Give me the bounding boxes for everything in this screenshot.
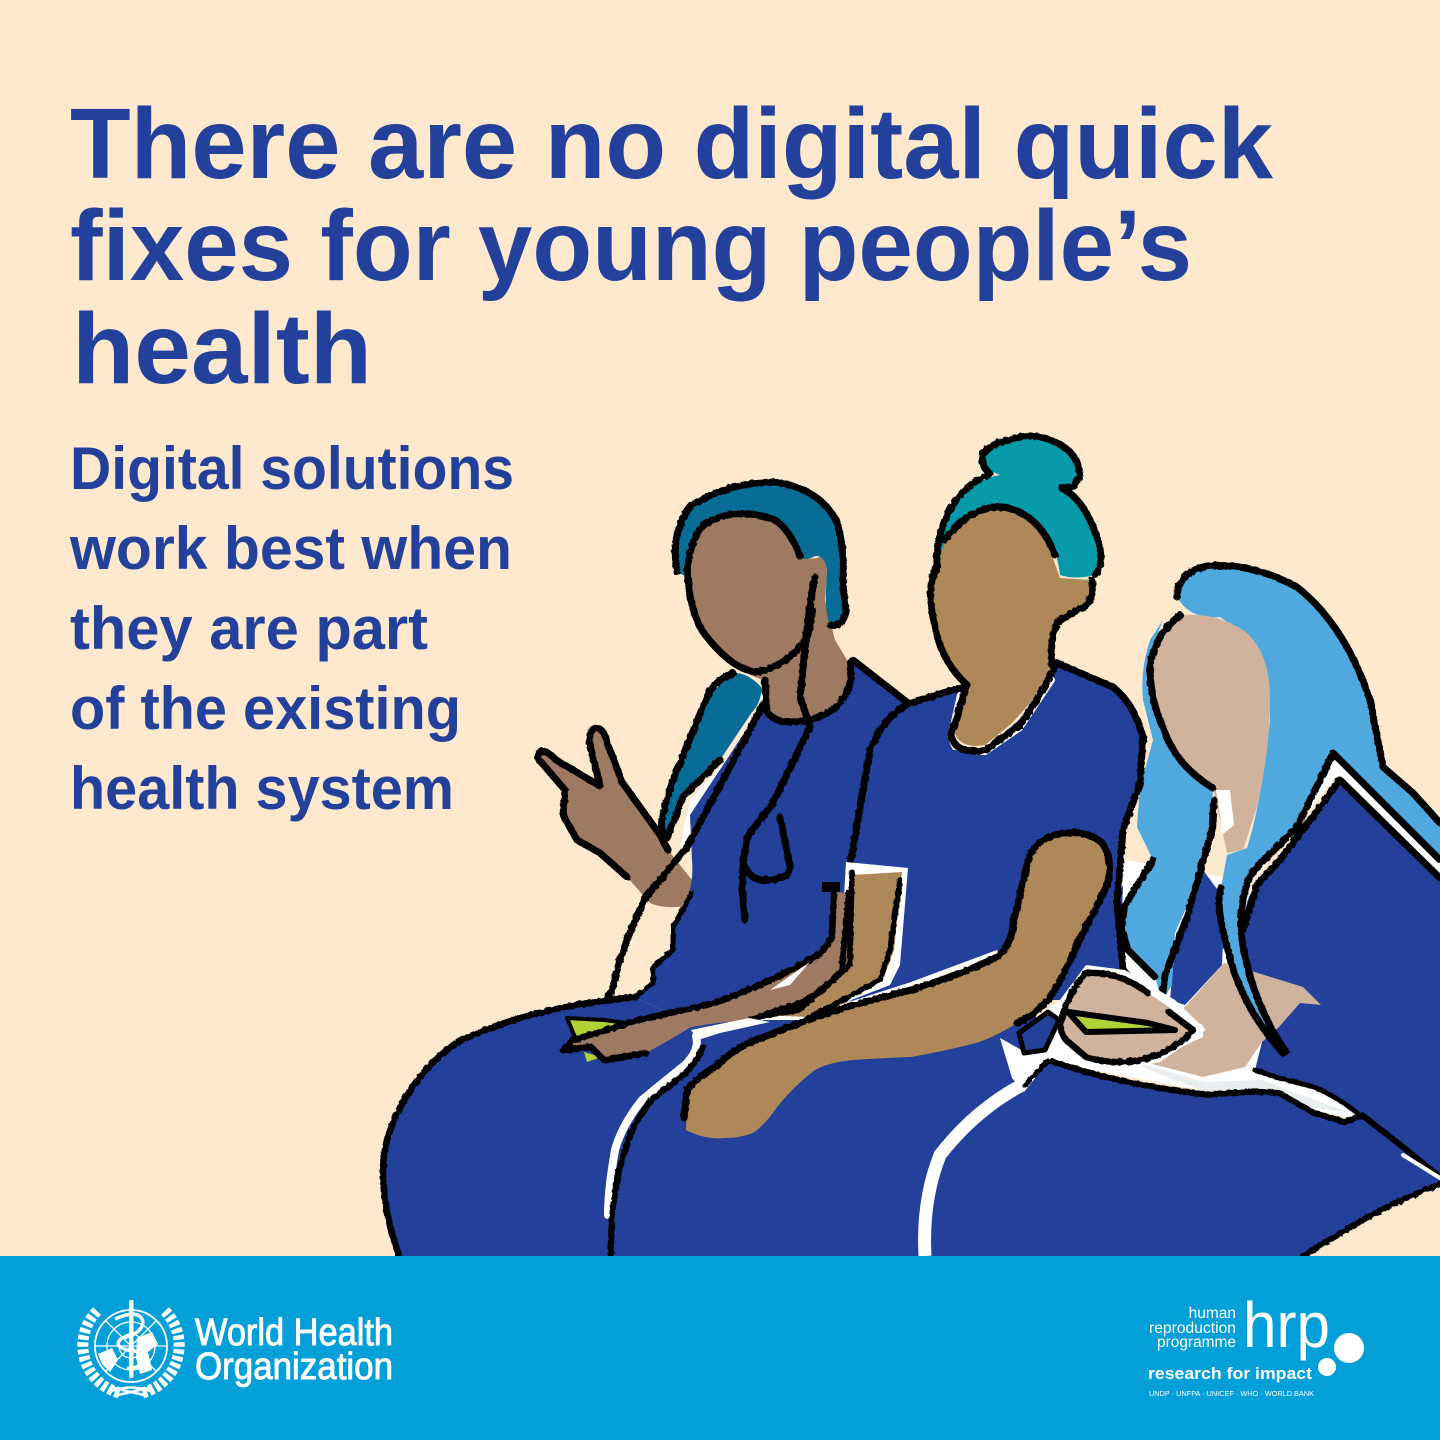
hair	[937, 473, 1101, 578]
title	[70, 88, 1273, 405]
phone	[567, 1018, 627, 1042]
right woman hand and phone	[1019, 965, 1206, 1070]
arm and torso skin	[1148, 963, 1321, 1077]
logo: human reproduction programme: reproduction	[1149, 1320, 1236, 1337]
blue gap near hand	[1019, 1012, 1059, 1053]
left woman forearm and phone	[563, 882, 849, 1062]
face and neck	[1150, 615, 1270, 853]
ponytail	[662, 673, 762, 838]
logo: World Health Organization	[83, 1300, 393, 1396]
figure: middle woman lap	[608, 950, 1066, 1256]
figure: left woman upper body	[538, 482, 908, 1023]
figure: middle woman	[840, 436, 1143, 1000]
white edge line	[608, 1036, 697, 1215]
shirt	[840, 663, 1143, 1000]
title: health	[72, 293, 372, 405]
white junction	[1000, 1038, 1066, 1092]
logo: human reproduction programme: UNDP · UNFPA · UNICEF · WHO · WORLD BANK	[1149, 1389, 1314, 1398]
peace-sign hand	[541, 728, 692, 907]
subtitle text block: health system	[70, 755, 454, 822]
white band to right lap	[925, 1085, 1022, 1256]
logo: World Health Organization: Organization	[195, 1346, 393, 1388]
logo: human reproduction programme: programme	[1157, 1334, 1236, 1351]
white backing	[1000, 860, 1365, 1120]
figure: right woman	[1000, 565, 1440, 1180]
figure: left woman lap	[383, 997, 1000, 1256]
main hair	[1177, 565, 1440, 1053]
subtitle text block: they are part	[70, 595, 428, 662]
blue gaps between hair	[1170, 870, 1225, 1005]
phone	[1068, 1012, 1175, 1032]
middle woman arm	[684, 833, 1110, 1138]
hair bun	[982, 436, 1080, 490]
face and neck	[930, 507, 1093, 746]
figure: right woman lap	[912, 1060, 1440, 1256]
footer band	[0, 1256, 1440, 1440]
hair and shirt outlines	[1121, 565, 1440, 1117]
white neck sliver	[1216, 790, 1234, 835]
subtitle text block	[69, 435, 514, 822]
logo: human reproduction programme: hrp	[1243, 1289, 1330, 1361]
hair	[676, 483, 846, 627]
collar white	[951, 680, 1052, 752]
title: There are no digital quick	[70, 88, 1273, 200]
shirt	[635, 660, 908, 1017]
outlines	[850, 436, 1143, 970]
subtitle text block: work best when	[69, 515, 512, 582]
left hair	[1121, 620, 1213, 1002]
logo: human reproduction programme: research for impact	[1148, 1364, 1312, 1383]
title: fixes for young people’s	[70, 190, 1192, 302]
face and neck	[688, 512, 851, 722]
hand of middle woman behind arm	[749, 862, 908, 1020]
white stripes beside shirt	[1250, 768, 1440, 875]
white highlights	[770, 962, 810, 990]
logo: World Health Organization: World Health	[195, 1312, 393, 1354]
illustration: three young women with phones	[383, 436, 1440, 1256]
white sliver beside ponytail	[680, 712, 763, 850]
logo: human reproduction programme: human	[1189, 1305, 1236, 1322]
logo: human reproduction programme	[1148, 1289, 1364, 1398]
outlines and earphones	[538, 482, 908, 1023]
subtitle text block: of the existing	[70, 675, 461, 742]
light shadow below arm	[1120, 1058, 1350, 1113]
forearm and hand	[563, 892, 849, 1060]
emblem	[83, 1300, 179, 1396]
shirt	[1241, 780, 1440, 1180]
subtitle text block: Digital solutions	[70, 435, 514, 502]
